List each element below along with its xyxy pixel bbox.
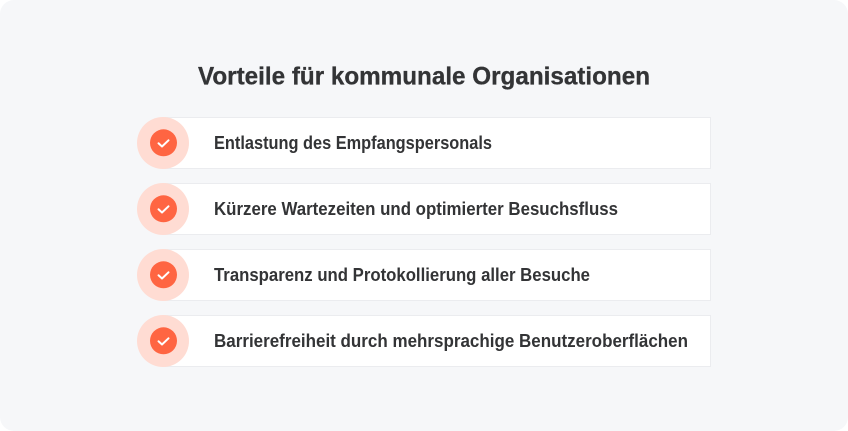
icon: check badge	[137, 249, 189, 301]
list item: Transparenz	[137, 249, 710, 301]
icon: check badge	[137, 117, 189, 169]
list item: Kürzere Wartezeiten	[137, 183, 710, 235]
item text: Transparenz und Protokollierung aller Besuche	[214, 265, 590, 285]
row box	[164, 250, 710, 300]
list item: Entlastung	[137, 117, 710, 169]
item text: Barrierefreiheit durch mehrsprachige Benutzeroberflächen	[214, 331, 688, 351]
list item: Barrierefreiheit	[137, 315, 710, 367]
icon: check badge	[137, 315, 189, 367]
row box	[164, 118, 710, 168]
item text: Entlastung des Empfangspersonals	[214, 133, 492, 153]
item text: Kürzere Wartezeiten und optimierter Besuchsfluss	[214, 199, 618, 219]
row box	[164, 316, 710, 366]
title: Vorteile für kommunale Organisationen	[198, 62, 650, 90]
row box	[164, 184, 710, 234]
icon: check badge	[137, 183, 189, 235]
